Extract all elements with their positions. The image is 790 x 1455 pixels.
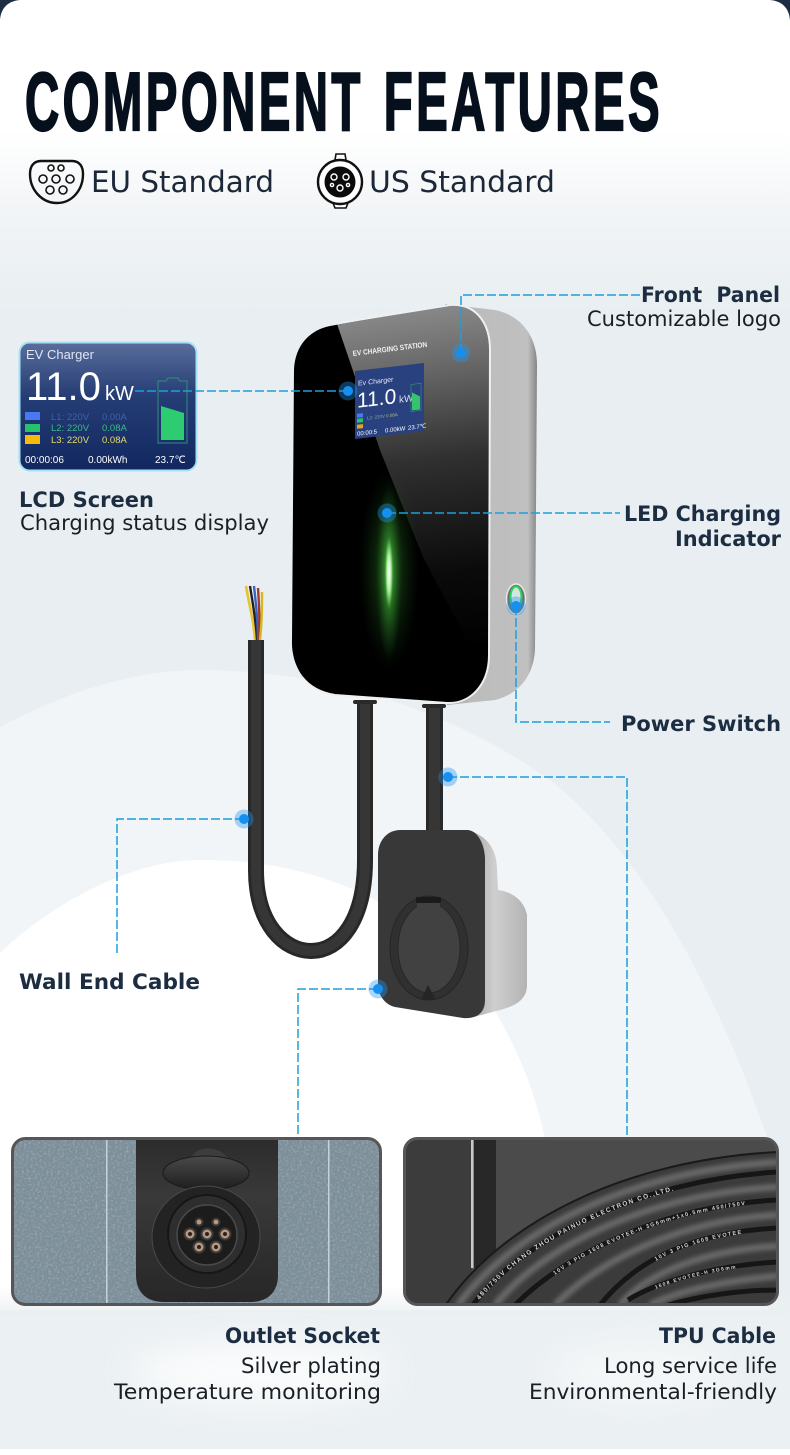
holster side (468, 830, 527, 1018)
socket pins (152, 1186, 260, 1288)
caption: Outlet Socket: Temperature monitoring (113, 1380, 381, 1404)
TPU cable (422, 704, 446, 835)
photo panel: outlet socket (12, 1138, 381, 1306)
cable print: 10V 3 PIG 1608 EVOTEE (654, 1230, 742, 1261)
caption: TPU Cable: Long service life (604, 1354, 777, 1378)
socket plate (136, 1138, 278, 1302)
LCD screen inset: 0.00kWh (88, 455, 127, 466)
caption: TPU Cable (529, 1324, 777, 1404)
LCD screen inset: L3: 220V (51, 435, 90, 446)
glass rim (302, 305, 490, 703)
label: EU Standard: EU Standard (91, 165, 274, 199)
caption: TPU Cable: TPU Cable (659, 1324, 776, 1348)
label: LED Charging Indicator: LED Charging (624, 502, 781, 526)
glass reflection (337, 306, 489, 658)
cable print: 10V 3 PIG 1608 EVOTEE-H 3G6mm+1x0.5mm 450/750V (553, 1201, 744, 1275)
socket holster (378, 830, 527, 1018)
on-device screen: Ev Charger (358, 377, 394, 388)
socket cover (390, 896, 468, 1000)
icon: EU standard connector (30, 161, 83, 203)
caption: Outlet Socket: Outlet Socket (225, 1324, 380, 1348)
label: LED Charging Indicator: Indicator (675, 527, 782, 551)
label: LED Charging Indicator (624, 502, 782, 551)
on-device screen: 11.0 (357, 385, 396, 413)
LCD screen inset: 0.08A (102, 423, 127, 434)
on-device screen: 0.00kW (385, 426, 406, 435)
LCD screen inset: 0.00A (102, 412, 127, 423)
label: Front Panel (587, 283, 781, 331)
on-device screen: L2: 220V (367, 414, 385, 421)
on-device screen: kW (399, 393, 414, 406)
side housing (445, 304, 537, 705)
label: Front Panel: Front Panel (641, 283, 780, 307)
LCD screen inset: 23.7℃ (155, 455, 186, 466)
label: Front Panel: Customizable logo (587, 307, 781, 331)
cable highlights (458, 1162, 778, 1305)
on-device screen: 0.08A (386, 412, 398, 418)
on-device screen (355, 363, 427, 439)
charger body (292, 295, 537, 705)
label: LCD Screen: LCD Screen (19, 488, 154, 512)
cable grooves (473, 1172, 778, 1305)
cable print: 1608 EVOTEE-H 3G6mm (654, 1266, 736, 1289)
label: LCD Screen (19, 488, 269, 535)
label: LCD Screen: Charging status display (20, 511, 269, 535)
caption: Outlet Socket: Silver plating (241, 1354, 381, 1378)
LCD screen inset: L2: 220V (51, 423, 90, 434)
caption: TPU Cable: Environmental-friendly (529, 1380, 777, 1404)
caption: Outlet Socket (113, 1324, 381, 1404)
coil base (445, 1152, 778, 1306)
LCD screen inset: kW (105, 383, 134, 405)
open cap (162, 1148, 250, 1189)
on-device screen: 23.7℃ (408, 424, 427, 432)
icon: US standard connector (318, 154, 362, 208)
printed text: EV CHARGING STATION (352, 340, 428, 358)
label: Wall End Cable: Wall End Cable (19, 970, 200, 994)
LCD screen inset: 0.08A (102, 435, 127, 446)
leader lines (117, 295, 640, 1137)
power switch (506, 584, 526, 614)
on-device screen: 00:00:5 (357, 429, 378, 438)
label: Power Switch: Power Switch (621, 712, 781, 736)
photo panel: TPU cable coil (403, 1137, 779, 1306)
marker dots (234, 344, 526, 998)
LCD screen inset: EV Charger (26, 347, 95, 362)
holster front (378, 830, 485, 1018)
LCD screen inset: 00:00:06 (25, 455, 64, 466)
LCD screen inset (20, 342, 196, 470)
wall end cable (246, 586, 377, 951)
glass front panel (292, 305, 490, 703)
label: US Standard: US Standard (369, 165, 555, 199)
LCD screen inset: L1: 220V (51, 412, 90, 423)
LCD screen inset: 11.0 (26, 365, 101, 409)
cable print: 480/750V CHANG ZHOU PAINUO ELECTRON CO.,LTD. (477, 1188, 674, 1300)
